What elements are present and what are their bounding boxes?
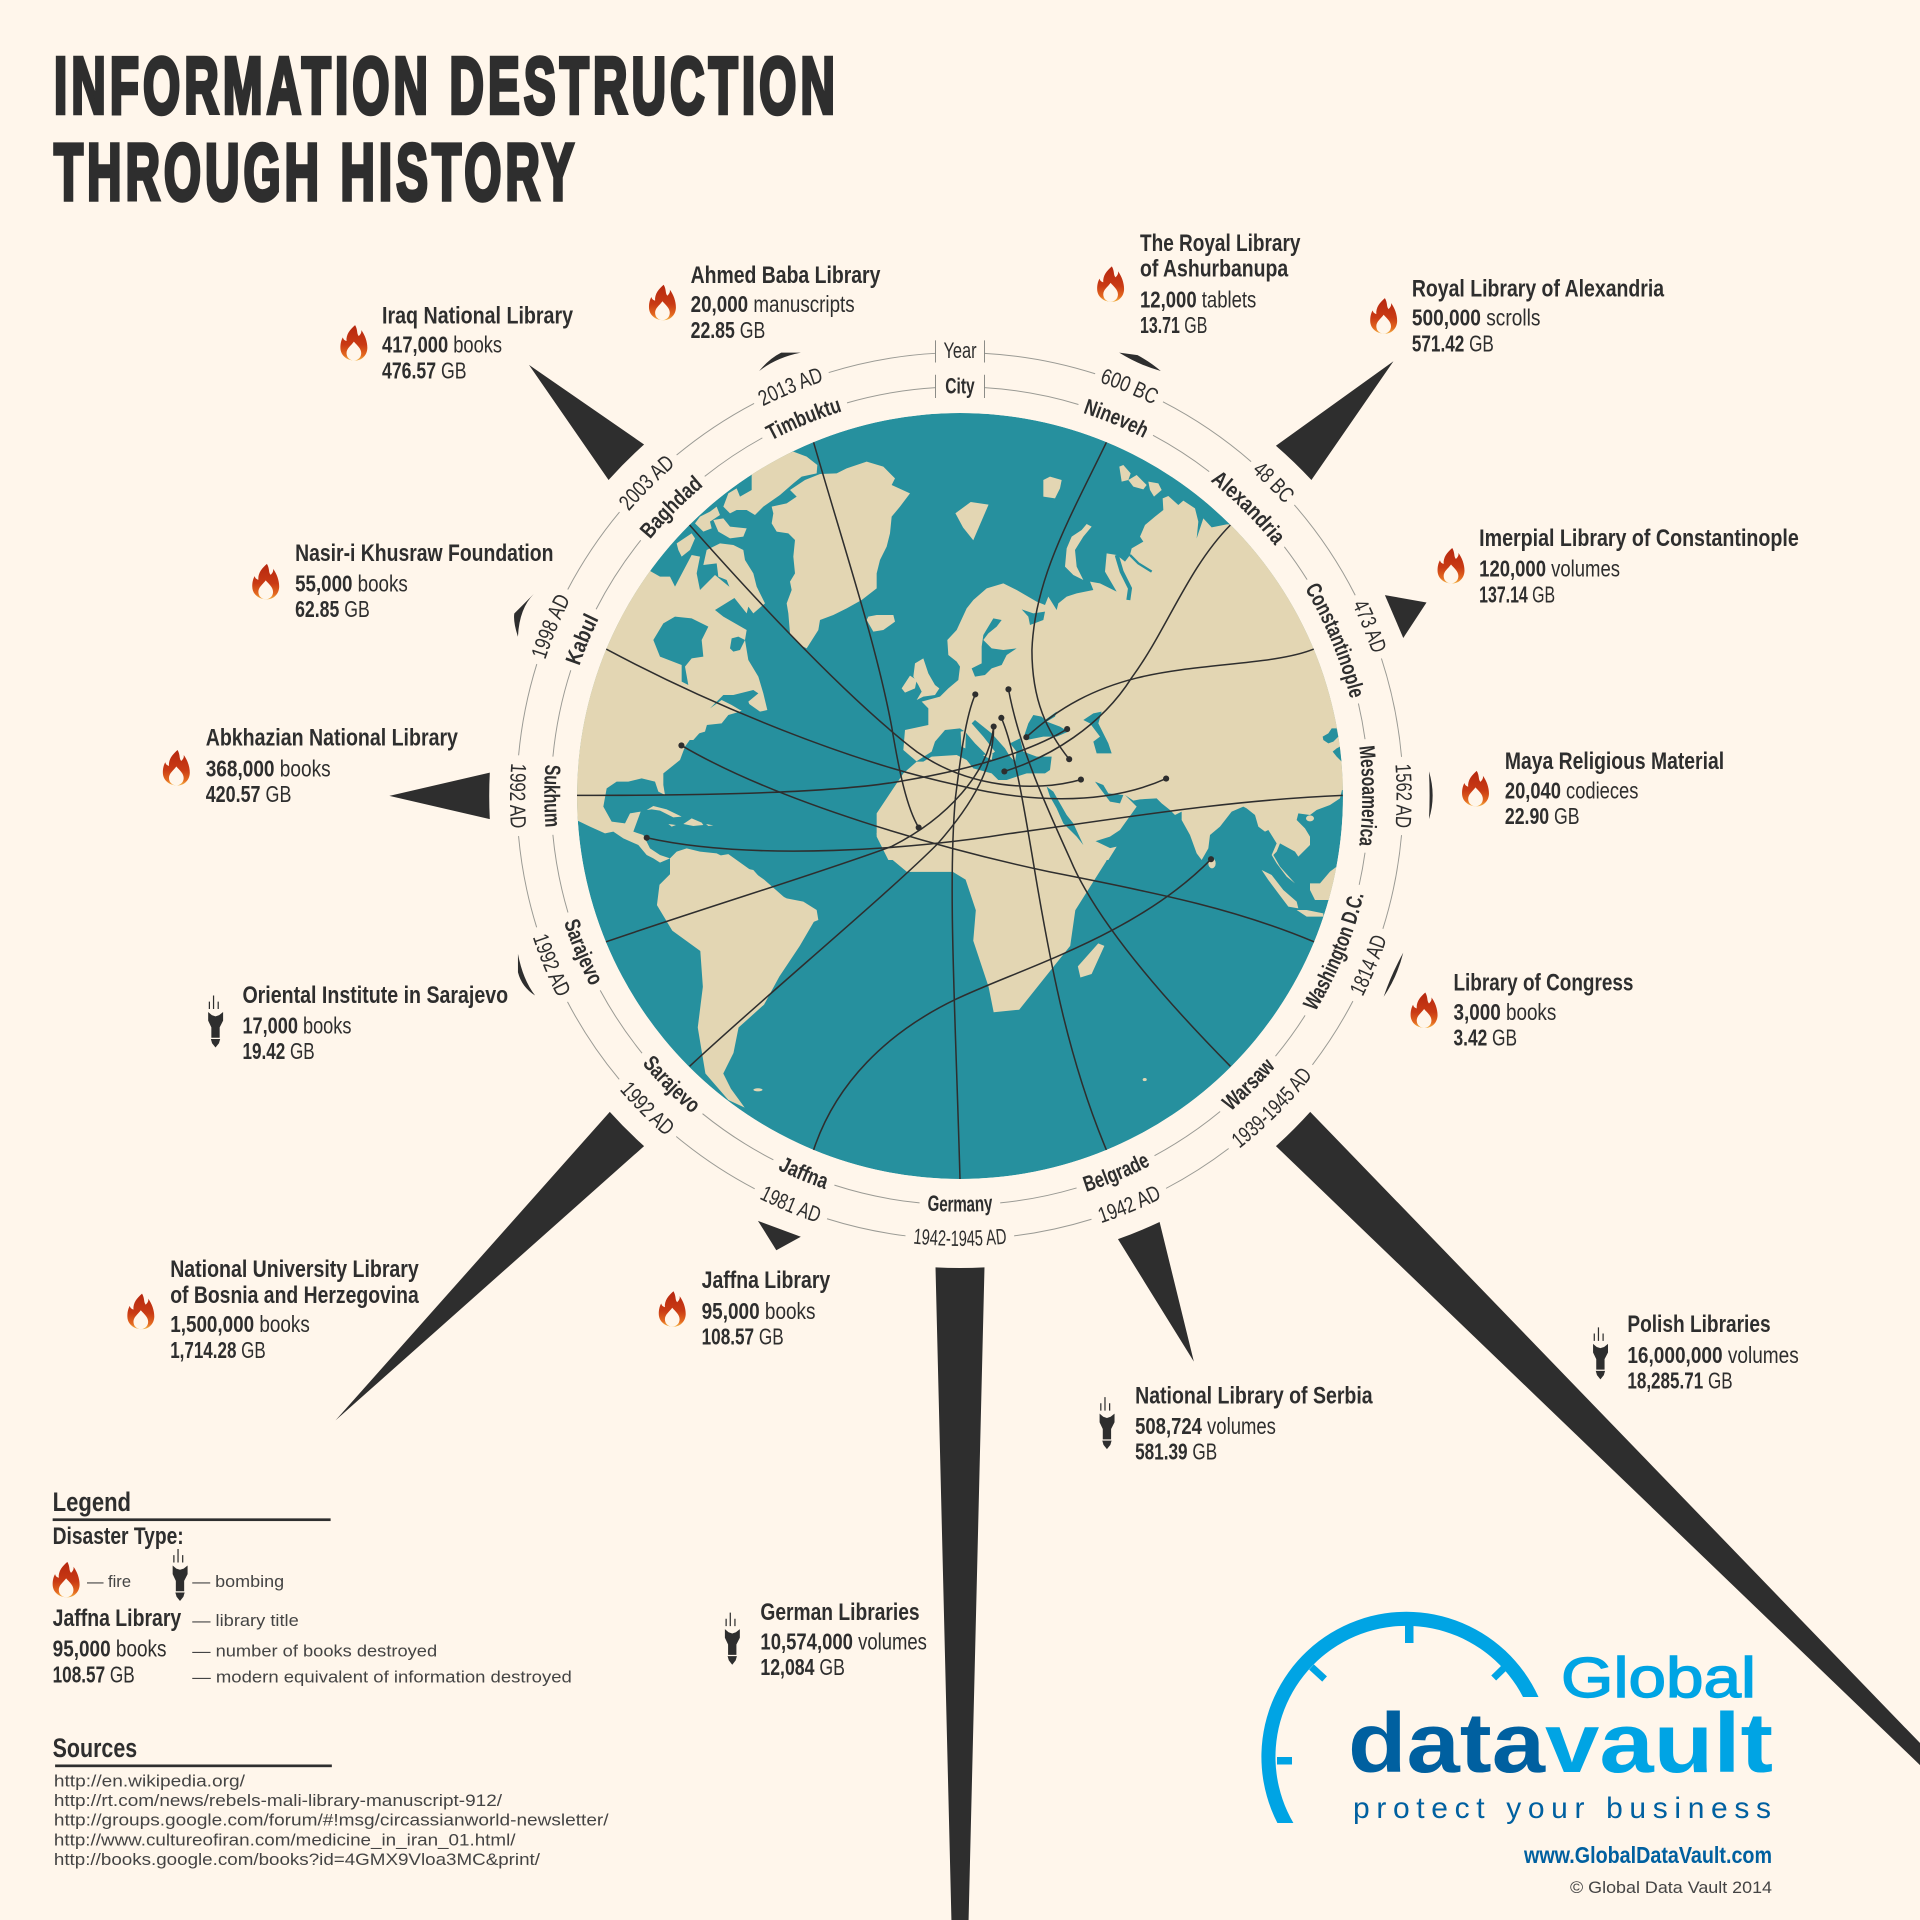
entry: Library of Congress: 3,000 books xyxy=(1453,999,1556,1025)
legend: Disaster Type: xyxy=(53,1523,184,1550)
spike: National University Library of Bosnia xyxy=(336,1112,644,1420)
entry: Royal Library of Alexandria: Royal Library of Alexandria xyxy=(1412,275,1664,302)
logo wordmark xyxy=(1348,1646,1773,1825)
legend: — number of books destroyed xyxy=(192,1642,437,1661)
sources: http://rt.com/news/rebels-mali-library-manuscript-912/ xyxy=(54,1791,503,1810)
sources: http://www.cultureofiran.com/medicine_in_iran_01.html/ xyxy=(54,1830,516,1849)
year labels: 1992 AD xyxy=(620,1082,673,1134)
entry: German Libraries xyxy=(725,1599,927,1680)
year labels xyxy=(510,368,1412,1246)
entry: Maya Religious Material: 22.90 GB xyxy=(1505,803,1580,829)
year ring xyxy=(517,353,1403,1239)
entry: Oriental Institute in Sarajevo: 19.42 GB xyxy=(242,1038,315,1064)
website url: www.GlobalDataVault.com xyxy=(1523,1842,1772,1868)
land: northern South America xyxy=(670,848,818,922)
entry: Nasir-i Khusraw Foundation: 55,000 books xyxy=(295,570,408,596)
entry: The Royal Library of Ashurbanupa: of Ashurbanupa xyxy=(1140,256,1288,283)
entry: Abkhazian National Library: 420.57 GB xyxy=(206,781,291,807)
city labels xyxy=(544,398,1378,1216)
entry: Imerpial Library of Constantinople: 137.14 GB xyxy=(1479,581,1555,607)
spike: Maya Religious Material xyxy=(1429,771,1433,819)
spike: Ahmed Baba Library xyxy=(759,353,801,371)
map land traced around Eurasia, Africa and the Americas xyxy=(577,465,1343,922)
entry: Royal Library of Alexandria: 500,000 scrolls xyxy=(1412,305,1540,331)
city labels: Kabul xyxy=(565,612,598,665)
city labels: Warsaw xyxy=(1220,1058,1274,1110)
city labels: Alexandria xyxy=(1210,472,1282,546)
entry: The Royal Library of Ashurbanupa: The Royal Library xyxy=(1140,230,1301,257)
year labels: 473 AD xyxy=(1354,602,1386,652)
city labels: Baghdad xyxy=(639,474,703,539)
entry: Imerpial Library of Constantinople: Imerpial Library of Constantinople xyxy=(1479,525,1799,552)
entry: Library of Congress: Library of Congress xyxy=(1453,970,1633,997)
entry: Ahmed Baba Library xyxy=(649,262,881,343)
legend: 95,000 books xyxy=(53,1636,167,1662)
land: Eurasia and north Africa xyxy=(877,496,1360,883)
entry: Jaffna Library xyxy=(659,1267,831,1349)
entry: Nasir-i Khusraw Foundation: Nasir-i Khusraw Foundation xyxy=(295,540,553,567)
ring headers: year and city: City xyxy=(945,374,975,399)
legend: — bombing xyxy=(192,1572,284,1591)
entry: National University Library of Bosnia and Herzegovina xyxy=(127,1256,419,1363)
land: North and Central America xyxy=(577,694,707,863)
entry: Library of Congress: 3.42 GB xyxy=(1453,1025,1517,1051)
title: INFORMATION DESTRUCTION xyxy=(54,41,839,130)
ring headers: year and city xyxy=(936,338,984,399)
entry: Library of Congress xyxy=(1411,970,1633,1051)
year labels: 2003 AD xyxy=(619,456,672,511)
legend: 108.57 GB xyxy=(53,1661,135,1687)
city labels: Jaffna xyxy=(779,1157,827,1189)
spike: Imperial Library of Constantinople xyxy=(1385,595,1427,638)
entry: Iraq National Library xyxy=(340,302,573,383)
spike: Royal Library of Alexandria xyxy=(1276,361,1393,480)
city labels: Germany xyxy=(928,1195,992,1216)
sources: http://books.google.com/books?id=4GMX9Vloa3MC&print/ xyxy=(54,1850,540,1869)
year labels: 48 BC xyxy=(1254,464,1294,502)
entry: Royal Library of Alexandria: 571.42 GB xyxy=(1412,330,1494,356)
year labels: 1939-1945 AD xyxy=(1232,1068,1310,1148)
sources: Sources xyxy=(53,1733,137,1763)
year labels: 1992 AD xyxy=(510,764,526,828)
entry: Polish Libraries: 18,285.71 GB xyxy=(1627,1368,1733,1394)
entry: Iraq National Library: 476.57 GB xyxy=(382,357,467,383)
title xyxy=(54,41,839,216)
entry: National Library of Serbia: 581.39 GB xyxy=(1135,1439,1217,1465)
entry: National Library of Serbia: National Library of Serbia xyxy=(1135,1382,1373,1409)
sources: http://en.wikipedia.org/ xyxy=(54,1772,245,1791)
legend: Jaffna Library xyxy=(53,1605,182,1632)
entry: Iraq National Library: Iraq National Library xyxy=(382,302,573,329)
year labels: 1981 AD xyxy=(760,1186,820,1221)
entry: Imerpial Library of Constantinople: 120,000 volumes xyxy=(1479,556,1620,582)
entry: National Library of Serbia xyxy=(1100,1382,1373,1465)
spike: Oriental Institute in Sarajevo xyxy=(518,954,535,996)
spike: Abkhazian National Library xyxy=(389,773,490,819)
city labels: Timbuktu xyxy=(764,400,842,439)
legend: — fire xyxy=(87,1572,131,1591)
city labels: Sarajevo xyxy=(644,1056,698,1112)
entry: Polish Libraries: 16,000,000 volumes xyxy=(1627,1342,1799,1368)
year labels: 1942 AD xyxy=(1098,1186,1160,1223)
entry: National University Library of Bosnia and Herzegovina: National University Library xyxy=(170,1256,419,1283)
world map globe xyxy=(543,413,1360,1179)
logo: Global Data Vault xyxy=(1261,1612,1773,1897)
entry: Jaffna Library: 95,000 books xyxy=(702,1298,816,1324)
city labels: Sarajevo xyxy=(565,919,600,984)
entry: The Royal Library of Ashurbanupa: 13.71 GB xyxy=(1140,312,1207,338)
entry: Ahmed Baba Library: Ahmed Baba Library xyxy=(691,262,881,289)
spike: Jaffna Library xyxy=(758,1221,801,1250)
ring headers: year and city: Year xyxy=(943,338,977,363)
year labels: 1998 AD xyxy=(532,595,568,659)
entry: Abkhazian National Library: Abkhazian National Library xyxy=(206,725,458,752)
map land traced at wide scale xyxy=(560,502,1147,1108)
legend: Legend xyxy=(53,1487,131,1517)
entry: German Libraries: German Libraries xyxy=(760,1599,920,1626)
copyright: © Global Data Vault 2014 xyxy=(1570,1879,1772,1897)
sources: http://groups.google.com/forum/#!msg/circassianworld-newsletter/ xyxy=(54,1811,609,1830)
legend: — library title xyxy=(192,1611,299,1630)
entry: Oriental Institute in Sarajevo: Oriental Institute in Sarajevo xyxy=(242,982,508,1009)
map land traced around the north Atlantic xyxy=(620,452,910,740)
logo wordmark: Global xyxy=(1561,1646,1756,1710)
city labels: Constantinople xyxy=(1307,584,1364,698)
entry: Iraq National Library: 417,000 books xyxy=(382,332,502,358)
entry: Nasir-i Khusraw Foundation xyxy=(252,540,553,622)
year labels: 600 BC xyxy=(1102,369,1158,403)
city labels: Sukhum xyxy=(544,765,560,827)
spike: Iraq National Library xyxy=(529,365,644,480)
entry: Oriental Institute in Sarajevo: 17,000 books xyxy=(242,1012,351,1038)
spike: Library of Congress xyxy=(1384,953,1403,997)
legend: — modern equivalent of information destroyed xyxy=(192,1667,572,1686)
year labels: 1992 AD xyxy=(533,934,570,996)
entry: Oriental Institute in Sarajevo xyxy=(208,982,508,1064)
city ring xyxy=(551,387,1369,1205)
entry: German Libraries: 12,084 GB xyxy=(760,1654,845,1680)
logo wordmark: protect your business xyxy=(1353,1792,1771,1825)
spike: Royal Library of Ashurbanupa xyxy=(1119,353,1161,371)
spike: Polish Libraries xyxy=(1276,1112,1920,1765)
city labels: Nineveh xyxy=(1084,398,1148,438)
entry: Imerpial Library of Constantinople xyxy=(1438,525,1799,607)
connection arcs and city dots xyxy=(576,442,1343,1179)
entry: Ahmed Baba Library: 22.85 GB xyxy=(691,317,765,343)
entry: The Royal Library of Ashurbanupa xyxy=(1097,230,1301,338)
city labels: Belgrade xyxy=(1082,1156,1149,1192)
entry: National University Library of Bosnia and Herzegovina: 1,500,000 books xyxy=(170,1311,310,1337)
entry: Polish Libraries: Polish Libraries xyxy=(1627,1311,1771,1338)
entry: Jaffna Library: Jaffna Library xyxy=(702,1267,831,1294)
logo wordmark: data xyxy=(1348,1696,1546,1790)
city labels: Washington D.C. xyxy=(1302,894,1364,1010)
spike: German Libraries xyxy=(936,1267,984,1920)
entry: Polish Libraries xyxy=(1593,1311,1799,1394)
logo gauge arc xyxy=(1261,1612,1538,1823)
entry: Abkhazian National Library xyxy=(163,725,458,807)
entry: National University Library of Bosnia and Herzegovina: of Bosnia and Herzegovina xyxy=(170,1282,419,1309)
year labels: 1814 AD xyxy=(1350,936,1386,996)
entry: The Royal Library of Ashurbanupa: 12,000 tablets xyxy=(1140,286,1256,312)
entry: Nasir-i Khusraw Foundation: 62.85 GB xyxy=(295,596,370,622)
information-size spikes xyxy=(336,353,1920,1920)
spike: National Library of Serbia xyxy=(1118,1222,1194,1362)
entry: National Library of Serbia: 508,724 volumes xyxy=(1135,1413,1276,1439)
title: THROUGH HISTORY xyxy=(54,128,578,216)
entry: German Libraries: 10,574,000 volumes xyxy=(760,1628,927,1654)
year labels: 2013 AD xyxy=(758,368,822,406)
city labels: Mesoamerica xyxy=(1359,746,1378,846)
entry: Abkhazian National Library: 368,000 books xyxy=(206,755,331,781)
entry: National University Library of Bosnia and Herzegovina: 1,714.28 GB xyxy=(170,1337,266,1363)
entry: Maya Religious Material: 20,040 codieces xyxy=(1505,777,1638,803)
entry: Jaffna Library: 108.57 GB xyxy=(702,1323,784,1349)
entry: Maya Religious Material: Maya Religious Material xyxy=(1505,748,1724,775)
sources xyxy=(53,1733,609,1869)
entry: Ahmed Baba Library: 20,000 manuscripts xyxy=(691,291,855,317)
entry: Maya Religious Material xyxy=(1462,748,1724,829)
spike: Nasir-i Khusraw Foundation xyxy=(514,594,534,637)
entry: Royal Library of Alexandria xyxy=(1370,275,1664,356)
year labels: 1562 AD xyxy=(1395,765,1412,828)
year labels: 1942-1945 AD xyxy=(914,1228,1006,1246)
logo wordmark: vault xyxy=(1545,1696,1773,1790)
legend xyxy=(53,1487,572,1687)
